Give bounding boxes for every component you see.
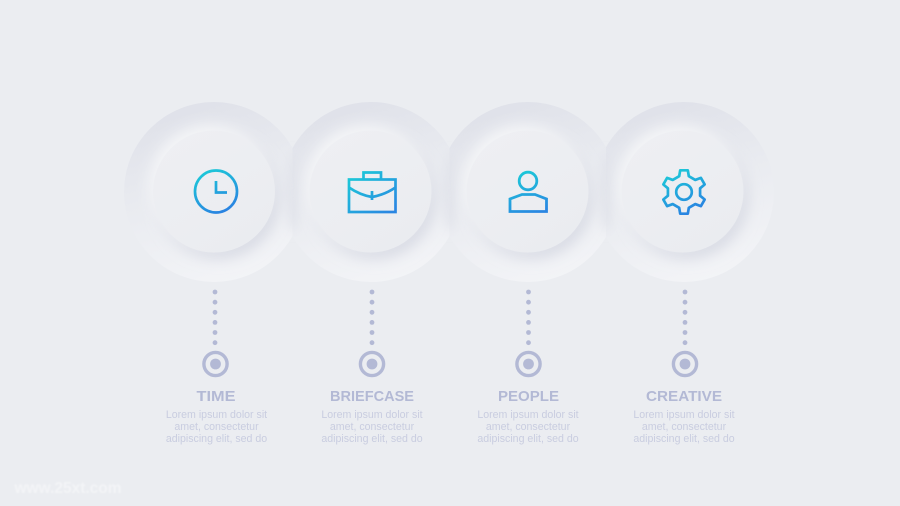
text block: creative: CREATIVE <box>646 388 722 405</box>
outer circles chain <box>135 102 728 206</box>
text block: time: Lorem ipsum dolor sit <box>166 409 267 421</box>
text block: creative: adipiscing elit, sed do <box>633 433 735 445</box>
panel: time circle <box>149 125 279 258</box>
text block: creative: Lorem ipsum dolor sit <box>633 409 735 421</box>
text block: briefcase: adipiscing elit, sed do <box>321 433 423 445</box>
text block: time: amet, consectetur <box>174 421 259 433</box>
text block: people: PEOPLE <box>498 388 559 405</box>
text block: people: adipiscing elit, sed do <box>477 433 579 445</box>
target marker: creative <box>673 352 697 376</box>
text block: briefcase: amet, consectetur <box>330 421 415 433</box>
target marker: briefcase <box>360 352 384 376</box>
panel: briefcase circle <box>306 125 436 258</box>
text block: creative <box>633 388 735 445</box>
panel: creative circle <box>618 125 748 258</box>
text block: time: TIME <box>196 388 236 405</box>
dotted connector: creative <box>683 290 687 345</box>
text block: briefcase: BRIEFCASE <box>330 388 414 405</box>
text block: people: amet, consectetur <box>486 421 571 433</box>
icon: briefcase <box>349 172 396 212</box>
target marker: people <box>517 352 540 376</box>
dotted connector: time <box>213 290 217 345</box>
icon: person <box>510 172 546 212</box>
text block: creative: amet, consectetur <box>642 421 727 433</box>
text block: people: Lorem ipsum dolor sit <box>477 409 579 421</box>
icon: gear <box>663 170 705 214</box>
text block: briefcase <box>321 388 423 445</box>
dotted connector: briefcase <box>370 290 374 345</box>
icon: clock <box>195 170 237 212</box>
text block: time <box>166 388 267 445</box>
target marker: time <box>204 352 227 376</box>
dotted connector: people <box>526 290 531 345</box>
watermark: www.25xt.com <box>13 480 122 497</box>
text block: briefcase: Lorem ipsum dolor sit <box>321 409 423 421</box>
text block: time: adipiscing elit, sed do <box>166 433 267 445</box>
panel: people circle <box>462 125 592 258</box>
text block: people <box>477 388 579 445</box>
